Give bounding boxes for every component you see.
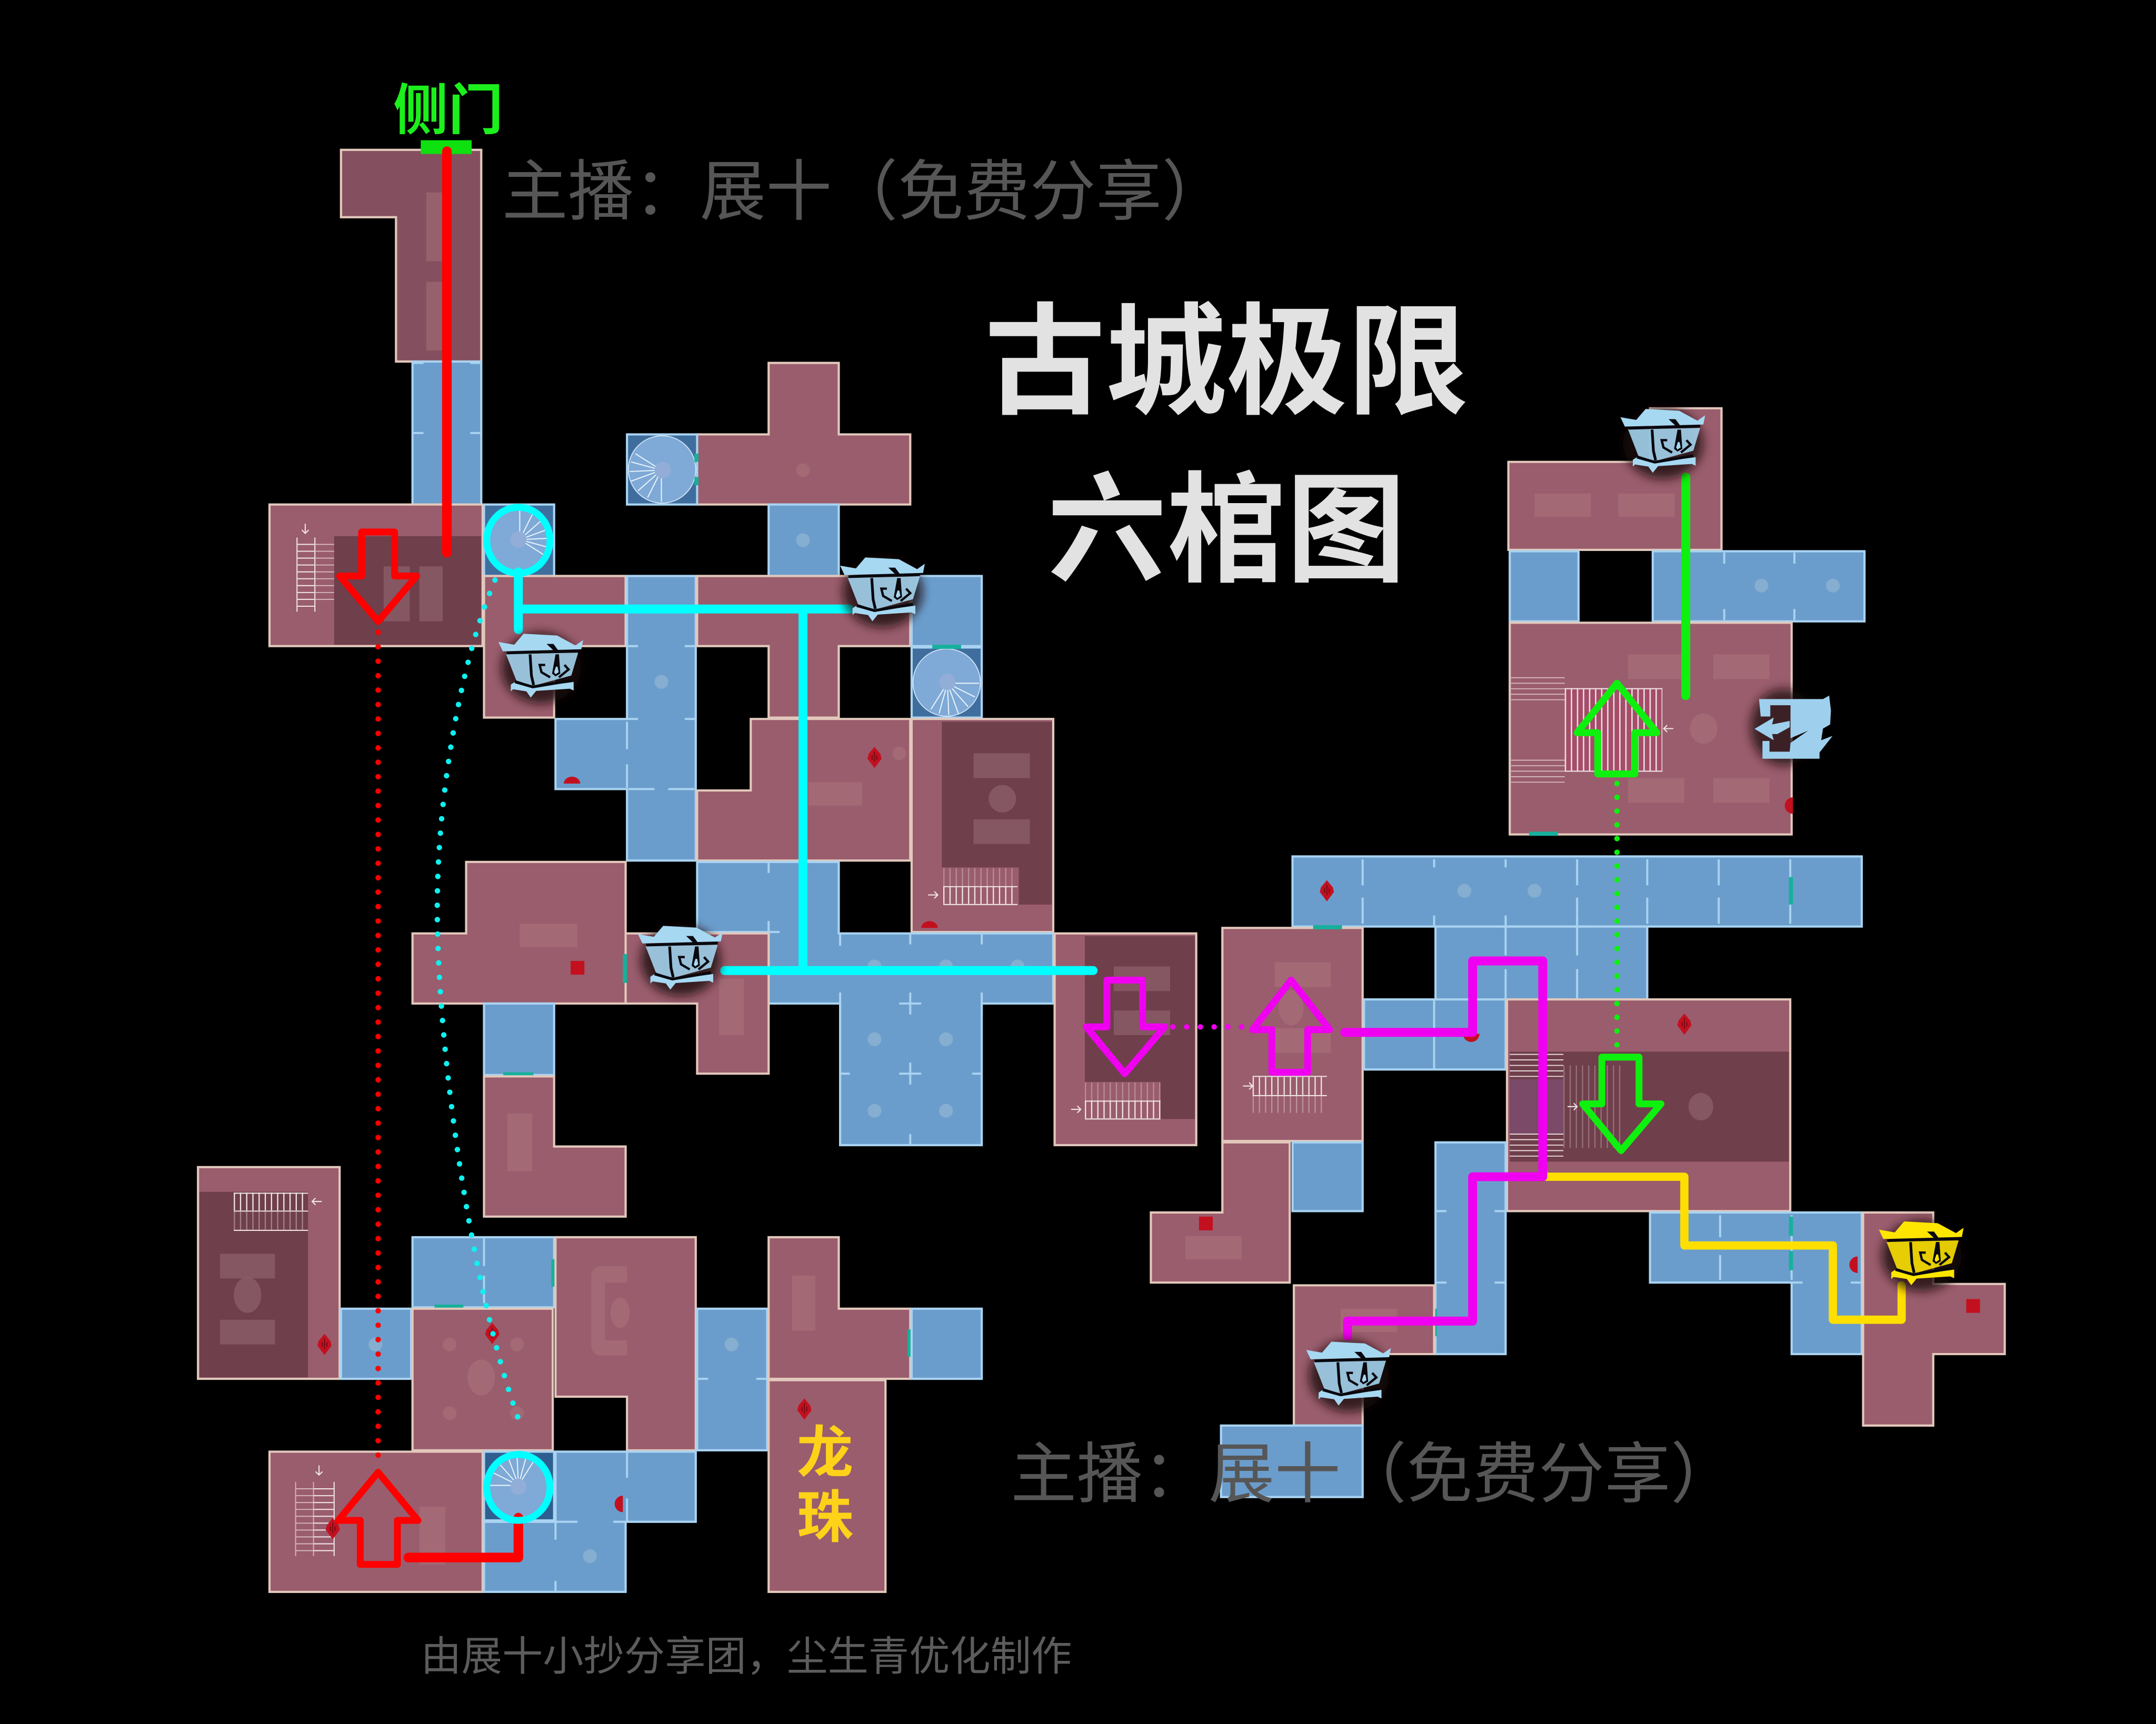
room: blue junction [1435,916,1647,999]
room: blue corridor north [1653,552,1864,622]
room: blue small [1293,1142,1363,1211]
panel: left wing floor plan [270,150,1196,1217]
title: 六棺图: 六棺图 [1047,434,1406,607]
icon: coffin 4 [1621,408,1705,479]
route: red dotted drop [377,633,379,1460]
footer credit: 由展十小抄分享团，尘生青优化制作 [421,1623,1072,1682]
room: up arrow hall [1222,925,1363,1141]
icon: exit door [1750,689,1833,766]
watermark: top: 主播：展十（免费分享） [502,139,1228,234]
room: spiral stair [484,505,554,576]
marker: cyan circle upper [487,507,550,573]
room: blue corridor [413,362,481,505]
route: red link to stair [408,1518,518,1558]
route: yellow [1543,1177,1902,1320]
marker: cyan circle lower [487,1455,550,1520]
room: top coffin hall [1509,408,1722,550]
room: spiral stair 3 [912,645,982,718]
route: cyan main [518,572,1093,970]
room: spiral stair 4 [484,1452,554,1520]
room: dragon pearl antechamber [768,1237,912,1379]
room: blue stepped corridor [1650,1212,1862,1354]
room: west hall [413,862,626,1004]
label: dragon pearl 珠: 珠 [797,1471,853,1553]
room: blue link north [1510,552,1579,622]
room: dark central hall [1507,999,1790,1211]
room: crossing hall [697,576,910,718]
arrow: green down [1583,1057,1661,1150]
room: L shaped [484,1076,626,1217]
room: C shaped altar hall [555,1237,696,1450]
room: blue east [912,576,982,646]
panel: right wing floor plan [1151,408,2005,1497]
room: blue cross [697,862,1053,1145]
room: coffin room south [1294,1285,1434,1426]
room: blue column [555,576,696,860]
room: blue link center [1364,999,1505,1069]
room: dark lower hall [912,719,1053,932]
title: 古城极限: 古城极限 [984,264,1469,439]
icon: golden coffin [1879,1220,1964,1291]
room: long blue corridor [1293,856,1862,927]
watermark: bottom: 主播：展十（免费分享） [1011,1421,1736,1517]
label: side door: 侧门 [393,66,503,146]
small stair direction arrows [302,524,1673,1475]
room: blue east link [912,1309,982,1379]
icon: coffin 3 [638,925,723,996]
icon: coffin 2 [840,556,925,627]
arrow: magenta down [1086,980,1165,1074]
icon: coffin 1 [498,633,583,704]
room: blue south link [697,1309,767,1450]
route: red line from side door [445,151,448,553]
route: magenta dotted [1173,1026,1249,1028]
room: blue double [413,1237,555,1309]
arrow: green up [1577,683,1657,774]
icon: coffin 5 [1306,1340,1391,1412]
panel: lower left floor plan [198,1167,982,1592]
room: small blue [768,505,839,576]
room: coffin corner [484,576,626,718]
room: spiral stair 2 [627,434,698,505]
route: cyan dotted stair link [437,580,523,1430]
arrow: red up [338,1472,418,1565]
arrow: magenta up [1253,980,1330,1073]
room: upper cross [697,363,910,505]
room: lower west hall [1151,1142,1290,1282]
room: dragon pearl room [768,1380,885,1592]
room: blue lower block [484,1452,696,1592]
room: entry corridor [341,150,481,362]
side door marker [421,140,472,154]
room: dark hall west [198,1167,340,1379]
label: dragon pearl 龙: 龙 [797,1407,853,1489]
room: lower stair room [270,1452,483,1592]
markers: red mechanisms [317,747,1980,1539]
room: blue column south [1433,1142,1505,1354]
room: exit hall [1510,623,1792,836]
room: final cross room [1863,1212,2005,1426]
room: blue link west [341,1309,411,1379]
room: upper stair room [270,505,483,646]
room: middle hall [697,719,910,860]
route: green line [1684,477,1688,696]
room: dark hall east [1055,934,1196,1145]
room: coffin hall [623,934,768,1074]
route: magenta main [1345,961,1543,1336]
room: blue south [1221,1426,1363,1497]
route: green dotted [1616,784,1618,1056]
room: column hall [413,1309,553,1450]
arrow: red down [340,532,417,622]
room: small blue south [484,1004,554,1076]
